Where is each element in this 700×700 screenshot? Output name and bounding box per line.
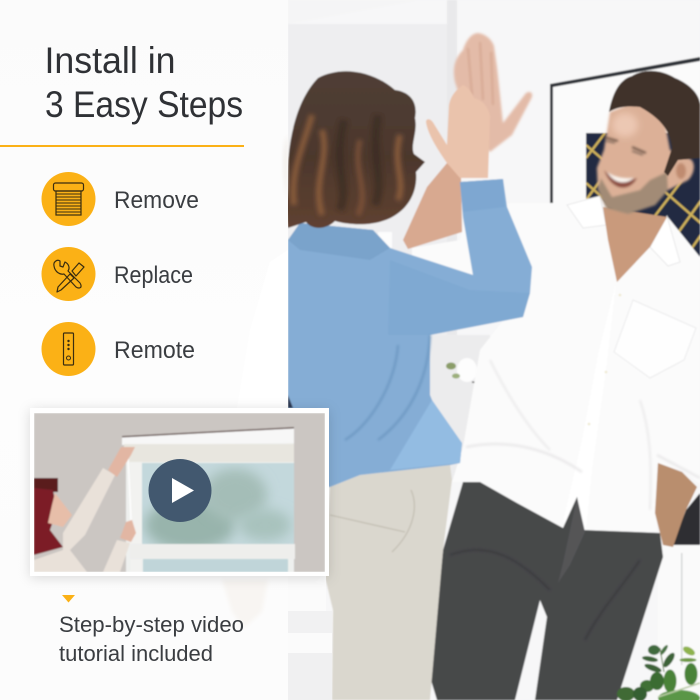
woman's trousers xyxy=(325,465,452,700)
cabinet xyxy=(658,493,700,700)
label: remote: Remote xyxy=(114,337,195,364)
caption xyxy=(59,612,244,666)
plant xyxy=(617,644,700,700)
label: remove: Remove xyxy=(114,187,199,214)
caption: tutorial included xyxy=(59,641,213,666)
wall background xyxy=(288,0,700,700)
left translucent panel xyxy=(0,0,288,700)
video thumbnail xyxy=(30,408,329,576)
caption: Step-by-step video xyxy=(59,612,244,637)
man's trousers xyxy=(430,482,663,700)
woman's hair xyxy=(287,71,425,228)
title: 3 Easy Steps xyxy=(45,84,243,125)
woman's blue shirt xyxy=(288,179,532,487)
video still xyxy=(34,413,325,572)
icon: wrench and screwdriver xyxy=(42,247,96,301)
strip of window sill xyxy=(288,576,332,700)
ghost of sleeve behind panel xyxy=(237,250,288,408)
ghost of hand behind panel xyxy=(222,580,268,628)
pointer triangle xyxy=(62,595,75,602)
man's face xyxy=(597,100,694,214)
label: replace: Replace xyxy=(114,262,193,289)
man's neck xyxy=(603,207,667,282)
man's right forearm xyxy=(655,463,697,547)
icon: remote control xyxy=(42,322,96,376)
woman's forearm xyxy=(403,163,462,249)
man's hair xyxy=(609,71,700,176)
framed picture xyxy=(550,57,700,268)
icon: window blind xyxy=(42,172,96,226)
man's white shirt xyxy=(412,196,700,532)
title rule xyxy=(0,145,244,147)
title: Install in xyxy=(44,40,176,81)
photo: two people high-fiving xyxy=(287,0,700,700)
title xyxy=(44,40,243,125)
man's raised hand xyxy=(454,33,532,152)
video frame xyxy=(30,408,329,576)
play button xyxy=(148,459,212,522)
woman's hand xyxy=(426,85,490,178)
step: remove xyxy=(42,172,199,226)
flower xyxy=(446,358,479,382)
step: remote xyxy=(42,322,195,376)
step: replace xyxy=(42,247,193,301)
